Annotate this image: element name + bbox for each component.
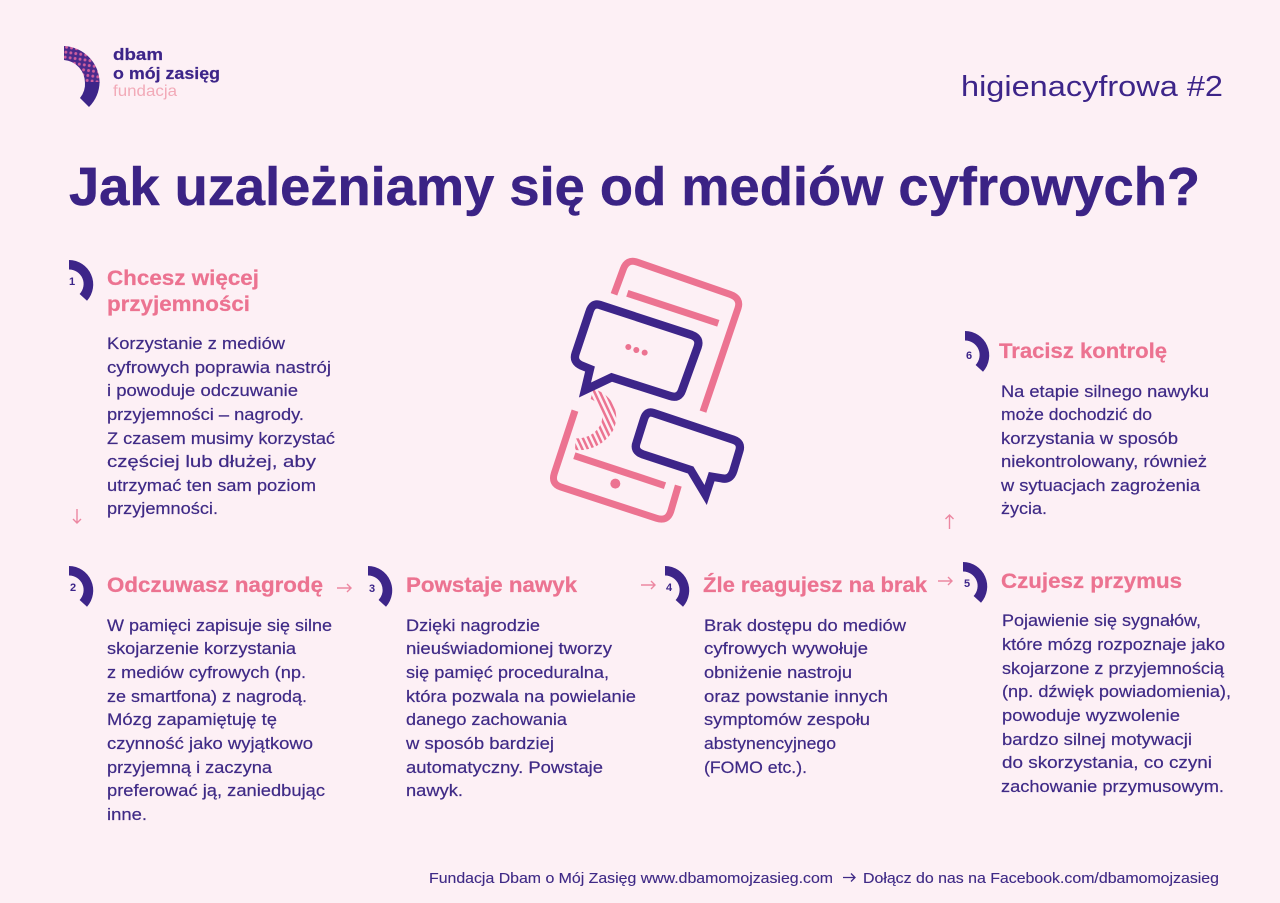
step 4 text: Brak dostępu do mediów [704, 616, 907, 635]
panel: step 1 [69, 260, 335, 518]
series tag: higienacyfrowa #2 [961, 71, 1223, 103]
step 4 heading: Źle reagujesz na brak [703, 572, 927, 597]
step 1 text: przyjemności – nagrody. [107, 405, 304, 424]
step 2 text: ze smartfona) z nagrodą. [107, 687, 307, 706]
step 1 text: Korzystanie z mediów [107, 334, 286, 353]
step 3 heading: Powstaje nawyk [406, 573, 577, 597]
step 4 text: obniżenie nastroju [704, 663, 852, 682]
logo mark [64, 46, 100, 107]
step 4 text: (FOMO etc.). [704, 758, 807, 777]
panel: step 4 [665, 566, 927, 777]
step 3 text: automatyczny. Powstaje [406, 758, 603, 777]
step 3 text: nieuświadomionej tworzy [406, 639, 613, 658]
footer [429, 871, 1219, 887]
step 4 text: abstynencyjnego [704, 734, 836, 753]
phone button [610, 479, 620, 489]
step 6 badge: 6 [966, 350, 972, 362]
step 5 text: bardzo silnej motywacji [1002, 730, 1192, 749]
step 2 text: skojarzenie korzystania [107, 639, 297, 658]
logo [64, 45, 220, 107]
step 4 text: symptomów zespołu [704, 710, 870, 729]
striped arc [575, 389, 616, 450]
step 2 text: Mózg zapamiętuję tę [107, 710, 277, 729]
logo text: fundacja [113, 83, 177, 100]
step 2 badge: 2 [70, 582, 76, 594]
step 5 badge: 5 [964, 578, 970, 590]
step 3 badge: 3 [369, 583, 375, 595]
panel: step 2 [69, 566, 332, 824]
step 1 text: cyfrowych poprawia nastrój [107, 358, 331, 377]
step 3 text: w sposób bardziej [405, 734, 554, 753]
step 2 text: przyjemną i zaczyna [107, 758, 273, 777]
step 3 text: która pozwala na powielanie [406, 687, 636, 706]
step 2 badge [69, 566, 93, 607]
arrow: step 5 to 6 [946, 515, 954, 529]
step 6 text: Na etapie silnego nawyku [1001, 382, 1209, 401]
step 1 text: przyjemności. [107, 499, 218, 518]
step 1 heading [107, 266, 259, 316]
step 2 text: z mediów cyfrowych (np. [107, 663, 306, 682]
logo text [113, 45, 220, 100]
step 1 text [107, 334, 335, 518]
footer: Dołącz do nas na Facebook.com/dbamomojzasieg [863, 871, 1219, 887]
step 6 heading: Tracisz kontrolę [999, 339, 1167, 363]
step 6 text: w sytuacjach zagrożenia [1000, 476, 1201, 495]
panel: step 6 [965, 331, 1209, 518]
step 5 text [1001, 611, 1231, 796]
step 2 text: inne. [107, 805, 147, 824]
step 1 badge: 1 [69, 276, 75, 288]
footer: Fundacja Dbam o Mój Zasięg www.dbamomojzasieg.com [429, 871, 833, 887]
step 1 text: i powoduje odczuwanie [107, 381, 298, 400]
step 1 badge [69, 260, 93, 301]
step 1 text: częściej lub dłużej, aby [107, 452, 317, 471]
step 4 text [704, 616, 907, 777]
typing dots [625, 344, 648, 356]
arrow: step 4 to 5 [938, 577, 952, 585]
step 6 text: niekontrolowany, również [1001, 452, 1207, 471]
step 3 text: nawyk. [406, 781, 463, 800]
step 6 badge [965, 331, 989, 372]
step 5 badge [963, 562, 987, 603]
step 1 heading: przyjemności [107, 292, 250, 316]
step 1 heading: Chcesz więcej [107, 266, 259, 290]
step 5 text: Pojawienie się sygnałów, [1002, 611, 1201, 630]
step 3 text: Dzięki nagrodzie [406, 616, 540, 635]
step 3 text: się pamięć proceduralna, [406, 663, 609, 682]
logo text: dbam [113, 45, 163, 64]
chat bubble: lower [636, 412, 740, 495]
step 5 text: które mózg rozpoznaje jako [1002, 635, 1225, 654]
step 6 text: może dochodzić do [1001, 405, 1152, 424]
step 2 heading: Odczuwasz nagrodę [107, 573, 323, 597]
step 3 text: danego zachowania [406, 710, 568, 729]
step 6 text: korzystania w sposób [1001, 429, 1178, 448]
step 5 text: (np. dźwięk powiadomienia), [1002, 682, 1231, 701]
arrow: step 1 to 2 [73, 509, 81, 523]
step 5 heading: Czujesz przymus [1001, 569, 1182, 593]
step 5 text: do skorzystania, co czyni [1002, 753, 1212, 772]
step 4 badge [665, 566, 689, 607]
step 3 badge [368, 566, 392, 607]
step 1 text: Z czasem musimy korzystać [107, 429, 335, 448]
step 2 text: preferować ją, zaniedbując [107, 781, 325, 800]
step 6 text [1000, 382, 1209, 518]
step 4 text: cyfrowych wywołuje [704, 639, 868, 658]
chat bubble: upper [575, 304, 698, 397]
phone outline [553, 261, 739, 519]
step 3 text [405, 616, 636, 800]
step 5 text: zachowanie przymusowym. [1001, 777, 1224, 796]
title: Jak uzależniamy się od mediów cyfrowych? [69, 157, 1200, 217]
step 1 text: utrzymać ten sam poziom [107, 476, 316, 495]
arrow: step 3 to 4 [641, 581, 655, 589]
illustration: phone with chat bubbles [553, 261, 740, 519]
step 6 text: życia. [1001, 499, 1047, 518]
step 2 text: W pamięci zapisuje się silne [107, 616, 332, 635]
logo text: o mój zasięg [113, 64, 220, 83]
step 5 text: powoduje wyzwolenie [1002, 706, 1180, 725]
panel: step 5 [963, 562, 1231, 796]
step 5 text: skojarzone z przyjemnością [1002, 659, 1225, 678]
step 2 text: czynność jako wyjątkowo [107, 734, 313, 753]
step 2 text [107, 616, 332, 824]
panel: step 3 [368, 566, 636, 800]
arrow: step 2 to 3 [337, 584, 351, 592]
step 4 text: oraz powstanie innych [704, 687, 888, 706]
step 4 badge: 4 [666, 582, 673, 594]
